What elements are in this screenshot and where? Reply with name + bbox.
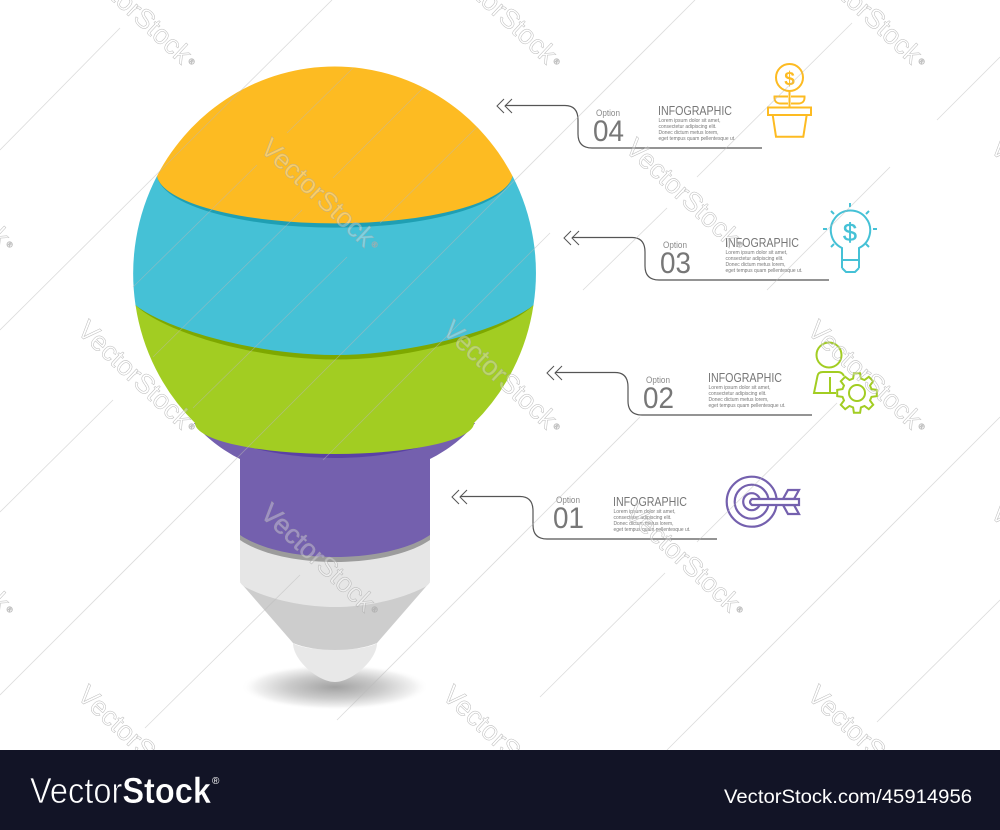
watermarks: ® — [369, 239, 380, 250]
icon: person with gear — [814, 342, 877, 413]
light bulb — [133, 66, 536, 710]
watermarks: ® — [916, 56, 927, 67]
text block 03: Donec dictum metus lorem, — [726, 262, 786, 268]
text block 04: eget tempus quam pellentesque ut. — [658, 136, 736, 142]
connector arrow 02 — [547, 366, 812, 415]
text block 04 — [658, 104, 736, 142]
watermarks: VectorStock — [255, 132, 381, 253]
watermarks: ® — [916, 421, 927, 432]
footer image id: VectorStock.com/45914956 — [724, 787, 972, 808]
text block 01: Lorem ipsum dolor sit amet, — [614, 509, 676, 515]
bulb tip — [293, 643, 377, 682]
text block 03: INFOGRAPHIC — [725, 236, 799, 250]
watermarks: ® — [916, 786, 927, 797]
watermarks: VectorStock — [255, 497, 381, 618]
option label 03: Option — [663, 240, 687, 251]
text block 04: Lorem ipsum dolor sit amet, — [658, 118, 721, 124]
footer bar — [0, 750, 1000, 830]
text block 03: eget tempus quam pellentesque ut. — [726, 268, 802, 274]
number 02: 02 — [643, 382, 674, 415]
watermarks: ® — [551, 56, 562, 67]
watermarks: ® — [186, 786, 197, 797]
watermarks: ® — [186, 56, 197, 67]
text block 03: Lorem ipsum dolor sit amet, — [726, 250, 788, 256]
segment 01: purple neck — [194, 423, 475, 557]
text block 02: Lorem ipsum dolor sit amet, — [708, 385, 771, 391]
text block 04: consectetur adipiscing elit. — [658, 124, 716, 130]
connector arrow 01 — [452, 490, 717, 539]
text block 04: INFOGRAPHIC — [658, 104, 732, 118]
watermarks: ® — [734, 604, 745, 615]
option 03 — [564, 203, 877, 280]
watermarks: ® — [4, 239, 15, 250]
text block 01: eget tempus quam pellentesque ut. — [614, 527, 690, 533]
watermarks: VectorStock — [437, 314, 563, 435]
option 01 — [452, 477, 799, 539]
watermarks: ® — [734, 239, 745, 250]
segment 02: green band — [136, 305, 534, 454]
text block 02: eget tempus quam pellentesque ut. — [708, 403, 786, 409]
text block 04: Donec dictum metus lorem, — [658, 130, 719, 136]
segment 03: blue band — [133, 176, 536, 355]
number 04: 04 — [593, 115, 624, 148]
watermarks: ® — [551, 786, 562, 797]
base collar rim — [240, 530, 430, 562]
text block 02: consectetur adipiscing elit. — [708, 391, 766, 397]
watermarks: VectorStock — [437, 679, 563, 800]
connector arrow 03 — [564, 231, 829, 280]
watermarks: VectorStock — [620, 497, 746, 618]
bulb cone — [240, 582, 430, 650]
bulb shadow — [241, 664, 429, 710]
text block 03: consectetur adipiscing elit. — [726, 256, 784, 262]
number 01: 01 — [553, 502, 584, 535]
registered mark: ® — [212, 776, 220, 787]
text block 02: Donec dictum metus lorem, — [708, 397, 769, 403]
option label 02: Option — [646, 375, 670, 386]
watermarks: ® — [186, 421, 197, 432]
bulb base collar — [240, 530, 430, 607]
text block 01 — [613, 495, 690, 533]
option 04 — [497, 64, 811, 148]
watermarks: VectorStock — [802, 314, 928, 435]
text block 02: INFOGRAPHIC — [708, 371, 782, 385]
connector arrow 04 — [497, 99, 762, 148]
text block 01: consectetur adipiscing elit. — [614, 515, 672, 521]
watermarks: VectorStock — [802, 679, 928, 800]
text block 01: INFOGRAPHIC — [613, 495, 687, 509]
number 03: 03 — [660, 247, 691, 280]
icon: plant with coin in pot: $ — [784, 69, 795, 90]
watermarks: ® — [369, 604, 380, 615]
text block 01: Donec dictum metus lorem, — [614, 521, 674, 527]
icon: light bulb with dollar: $ — [843, 219, 857, 247]
icon: plant with coin in pot — [768, 64, 811, 137]
text block 02 — [708, 371, 786, 409]
text block 03 — [725, 236, 802, 274]
watermarks: VectorStock — [72, 314, 198, 435]
icon: light bulb with dollar — [823, 203, 877, 272]
option label 01: Option — [556, 495, 580, 506]
watermarks: ® — [4, 604, 15, 615]
footer logo: VectorStock — [30, 770, 212, 811]
segment 04: yellow dome — [157, 66, 512, 223]
watermarks: VectorStock — [620, 132, 746, 253]
watermarks: ® — [551, 421, 562, 432]
icon: target with arrow — [727, 477, 799, 527]
watermarks: VectorStock — [72, 679, 198, 800]
option 02 — [547, 342, 877, 415]
option label 04: Option — [596, 108, 620, 119]
